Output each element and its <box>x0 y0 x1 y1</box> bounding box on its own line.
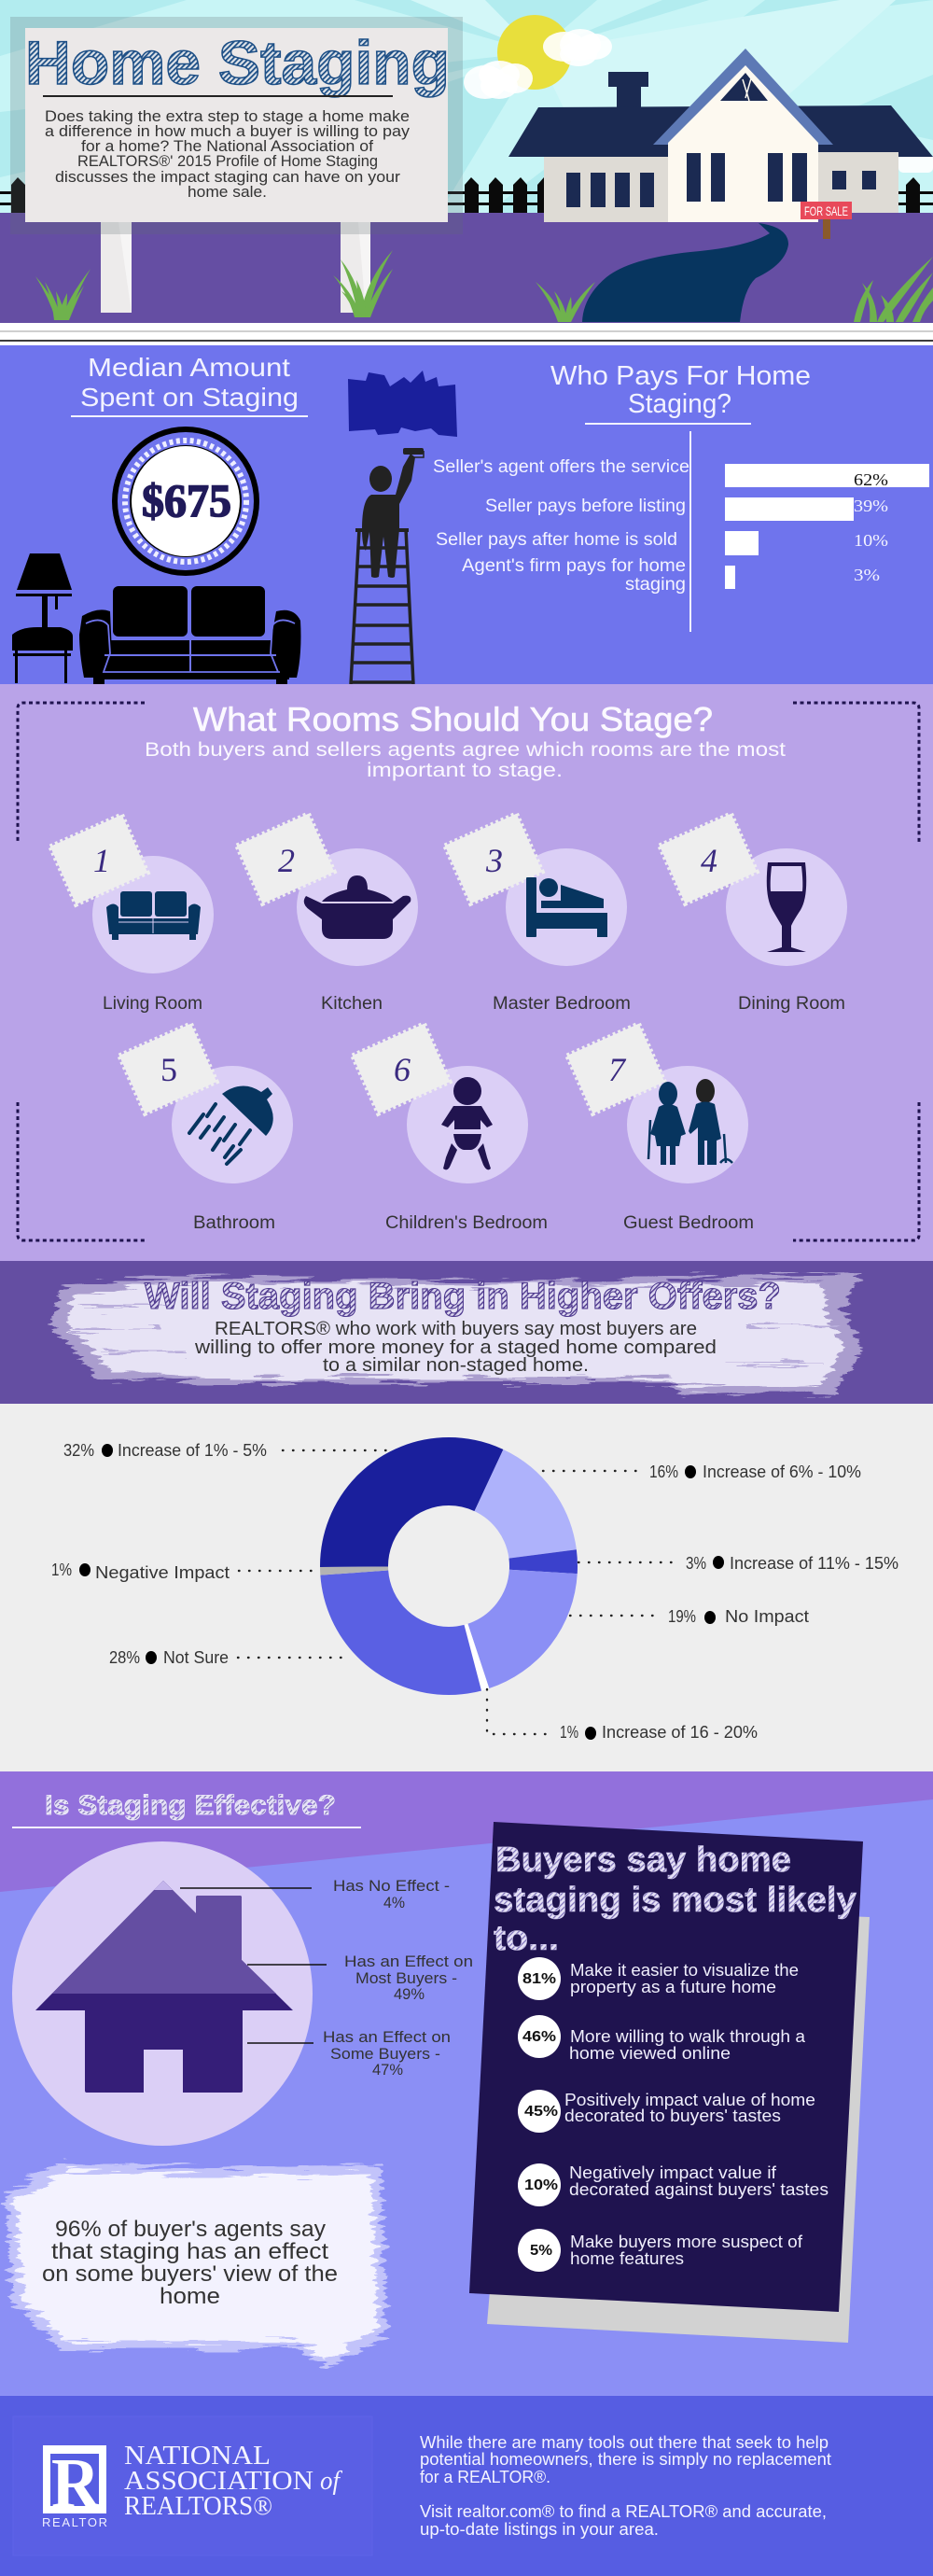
card shadow <box>487 1904 870 2343</box>
dotted leaders <box>238 1450 678 1734</box>
stat: 81%: Make it easier to visualize the <box>570 1961 799 1980</box>
label: 16%: Increase of 6% - 10% <box>703 1463 861 1481</box>
label: 28%: 28% <box>109 1648 140 1667</box>
bar chart: who pays: Seller's agent offers the service <box>433 457 689 477</box>
intro text: home sale. <box>188 184 267 201</box>
stat: 45%: Positively impact value of home <box>564 2091 815 2109</box>
house <box>508 49 933 222</box>
room 3: master bedroom: Master Bedroom <box>493 994 631 1014</box>
callout text: 96% of buyer's agents say <box>55 2217 326 2242</box>
label: most buyers: Most Buyers - <box>355 1969 457 1987</box>
stat: 81%: 81% <box>522 1971 556 1987</box>
icon: sofa <box>79 586 300 684</box>
label: 3%: Increase of 11% - 15% <box>730 1554 898 1573</box>
intro text: a difference in how much a buyer is willing to pay <box>45 123 411 140</box>
heading: who pays: Who Pays For Home <box>550 361 811 391</box>
label: 32%: 32% <box>63 1441 94 1460</box>
panel: median amount and who pays <box>0 345 933 684</box>
callout text <box>42 2217 338 2309</box>
association name: of <box>320 2466 343 2496</box>
stat: 5%: 5% <box>530 2243 552 2259</box>
room 4: dining room: 4 <box>701 842 717 879</box>
room 5: bathroom <box>119 1024 293 1233</box>
section background <box>0 1261 933 1404</box>
footer text: potential homeowners, there is simply no replacement <box>420 2450 831 2469</box>
winding path <box>582 223 788 322</box>
stat: 81% <box>518 1957 799 2000</box>
stat: 46%: More willing to walk through a <box>570 2027 806 2046</box>
intro text: REALTORS®' 2015 Profile of Home Staging <box>77 153 378 170</box>
room 5: bathroom: Bathroom <box>193 1213 275 1233</box>
card <box>469 1822 863 2312</box>
title: Home Staging <box>25 28 450 97</box>
room 7: guest bedroom: 7 <box>608 1051 627 1088</box>
footer text: up-to-date listings in your area. <box>420 2520 659 2539</box>
label: no effect: 4% <box>383 1894 405 1911</box>
callout text: home <box>160 2284 220 2309</box>
room 6: children's bedroom <box>353 1024 548 1233</box>
label: most buyers <box>344 1953 473 2003</box>
label: 16%: 16% <box>649 1463 678 1481</box>
heading: What Rooms Should You Stage? <box>193 700 713 738</box>
panel: will staging bring in higher offers <box>0 1261 933 1404</box>
panel: donut chart <box>0 1404 933 1771</box>
heading: who pays <box>550 361 811 425</box>
label: some buyers: Some Buyers - <box>330 2045 440 2063</box>
room 1: living room <box>50 815 214 1014</box>
stat: 5%: home features <box>570 2249 684 2268</box>
section background <box>0 1771 933 2396</box>
room 3: master bedroom: 3 <box>485 842 503 879</box>
body text: to a similar non-staged home. <box>323 1355 589 1376</box>
bar chart: who pays: 62% <box>854 470 888 489</box>
label: 28%: Not Sure <box>163 1648 229 1667</box>
subheading: Both buyers and sellers agents agree which rooms are the most <box>145 739 786 761</box>
label: 19% <box>668 1607 809 1626</box>
faint logo frame <box>13 2416 372 2555</box>
label: 28% <box>109 1648 229 1667</box>
heading rule <box>12 1827 361 1828</box>
grass tuft on post <box>333 250 393 317</box>
room 1: living room: 1 <box>93 842 110 879</box>
sun <box>497 15 572 90</box>
heading: who pays: Staging? <box>628 389 731 419</box>
divider bands <box>0 330 933 342</box>
label: 1% negative: Negative Impact <box>95 1563 230 1582</box>
footer text: Visit realtor.com® to find a REALTOR® and accurate, <box>420 2502 827 2521</box>
panel: footer <box>0 2396 933 2576</box>
intro text: Does taking the extra step to stage a home make <box>45 108 410 125</box>
room 5: bathroom: 5 <box>160 1051 177 1088</box>
bar chart: who pays: Seller pays before listing <box>485 497 686 516</box>
footer background <box>0 2396 933 2576</box>
footer text <box>420 2433 831 2539</box>
room 7: guest bedroom: Guest Bedroom <box>623 1213 754 1233</box>
association name: REALTORS® <box>124 2491 272 2521</box>
grass tuft left <box>35 269 91 320</box>
section background <box>0 1404 933 1771</box>
house leader lines <box>180 1888 327 2043</box>
card title: Buyers say home <box>495 1841 791 1880</box>
bar chart: who pays: 10% <box>854 531 888 550</box>
stat: 10%: 10% <box>524 2177 558 2193</box>
label: some buyers: 47% <box>372 2061 403 2079</box>
brush stroke <box>50 1275 863 1396</box>
room 2: kitchen: 2 <box>278 842 295 879</box>
intro text: for a home? The National Association of <box>81 138 373 155</box>
billboard shadow frame <box>10 17 463 234</box>
room 6: children's bedroom: 6 <box>394 1051 411 1088</box>
heading: median amount <box>71 353 308 417</box>
room 2: kitchen <box>237 814 418 1014</box>
card title: to... <box>494 1919 559 1958</box>
stat: 5%: Make buyers more suspect of <box>570 2233 803 2251</box>
grass tuft right <box>854 257 933 322</box>
icon: lamp and side table <box>12 553 73 683</box>
medallion with amount: $675 <box>142 474 231 526</box>
grass tuft middle <box>536 282 595 322</box>
heading: median amount: Median Amount <box>88 353 290 382</box>
billboard <box>25 28 448 222</box>
stat: 10%: decorated against buyers' tastes <box>569 2180 829 2199</box>
body text: REALTORS® who work with buyers say most buyers are <box>215 1319 697 1339</box>
card title: staging is most likely <box>494 1881 856 1920</box>
bar chart: who pays: 3% <box>854 566 880 584</box>
panel: is staging effective <box>0 1771 933 2396</box>
label: 1% increase: 1% <box>560 1723 578 1742</box>
stat: 45%: 45% <box>524 2104 558 2120</box>
room 3: master bedroom <box>445 814 631 1014</box>
section background <box>0 345 933 684</box>
axis <box>689 431 691 632</box>
stat: 45%: decorated to buyers' tastes <box>564 2107 781 2125</box>
realtor logo: R <box>51 2444 101 2523</box>
label: 19%: No Impact <box>725 1607 809 1626</box>
paint patch <box>348 371 457 437</box>
dashed corner frame <box>18 703 919 1240</box>
stat: 46%: 46% <box>522 2029 556 2045</box>
stat: 46% <box>518 2015 806 2063</box>
heading: median amount: Spent on Staging <box>80 383 299 412</box>
intro text: discusses the impact staging can have on your <box>55 169 401 186</box>
picket fence <box>0 177 933 213</box>
subheading: important to stage. <box>367 760 563 781</box>
purple wedge <box>0 1771 933 1892</box>
bar chart: who pays: Seller pays after home is sold <box>436 530 677 550</box>
label: some buyers <box>323 2028 451 2079</box>
bar chart: who pays <box>433 457 929 595</box>
label: 1% negative: 1% <box>51 1561 72 1579</box>
callout text: that staging has an effect <box>51 2239 328 2264</box>
footer text: While there are many tools out there that seek to help <box>420 2433 829 2452</box>
sky with rays <box>0 0 933 215</box>
panel: what rooms should you stage <box>0 684 933 1261</box>
footer text: for a REALTOR®. <box>420 2468 550 2486</box>
bar chart: who pays: Agent's firm pays for home <box>462 556 686 576</box>
room 2: kitchen: Kitchen <box>321 994 383 1014</box>
ground <box>0 213 933 323</box>
room 1: living room: Living Room <box>103 994 202 1014</box>
label: most buyers: Has an Effect on <box>344 1953 473 1970</box>
room 4: dining room: Dining Room <box>738 994 845 1014</box>
room 6: children's bedroom: Children's Bedroom <box>385 1213 548 1233</box>
for sale sign: FOR SALE <box>804 203 848 218</box>
billboard posts <box>101 222 370 313</box>
subheading <box>145 739 786 781</box>
stat: 45% <box>518 2090 815 2133</box>
brush stroke callout <box>6 2163 387 2370</box>
room 4: dining room <box>660 814 847 1014</box>
label: no effect <box>333 1877 450 1911</box>
bar chart: who pays: staging <box>625 575 686 595</box>
heading: Is Staging Effective? <box>45 1790 336 1821</box>
card title <box>494 1841 856 1958</box>
label: 3%: 3% <box>686 1554 706 1573</box>
section background <box>0 684 933 1261</box>
stat: 81%: property as a future home <box>570 1978 776 1996</box>
bar chart: who pays: 39% <box>854 497 888 515</box>
realtor logo: REALTOR <box>42 2515 107 2529</box>
heading: Will Staging Bring in Higher Offers? <box>145 1276 781 1317</box>
house chart <box>35 1881 293 2093</box>
medallion with amount <box>112 427 259 576</box>
big circle <box>12 1841 313 2146</box>
label: 1% increase: Increase of 16 - 20% <box>602 1723 758 1742</box>
for sale sign <box>801 202 852 239</box>
panel: hero <box>0 0 933 323</box>
association name: ASSOCIATION <box>124 2466 313 2496</box>
room 7: guest bedroom <box>567 1024 754 1233</box>
stat: 5% <box>518 2229 803 2272</box>
stat: 10%: Negatively impact value if <box>569 2163 777 2182</box>
title rule <box>43 95 393 97</box>
donut chart <box>355 1471 543 1661</box>
callout text: on some buyers' view of the <box>42 2261 338 2287</box>
association name: NATIONAL <box>124 2441 271 2471</box>
stat: 10% <box>518 2163 829 2206</box>
body text <box>194 1319 717 1376</box>
icon: painter on ladder <box>351 448 424 684</box>
clouds <box>464 29 933 173</box>
intro text <box>45 108 411 201</box>
label: 1% negative <box>51 1561 230 1582</box>
label: most buyers: 49% <box>394 1985 425 2003</box>
label: some buyers: Has an Effect on <box>323 2028 451 2046</box>
label: 19%: 19% <box>668 1607 696 1626</box>
association name <box>124 2441 343 2521</box>
label: no effect: Has No Effect - <box>333 1877 450 1895</box>
label: 32%: Increase of 1% - 5% <box>118 1441 267 1460</box>
stat: 46%: home viewed online <box>569 2044 731 2063</box>
body text: willing to offer more money for a staged home compared <box>194 1337 717 1358</box>
